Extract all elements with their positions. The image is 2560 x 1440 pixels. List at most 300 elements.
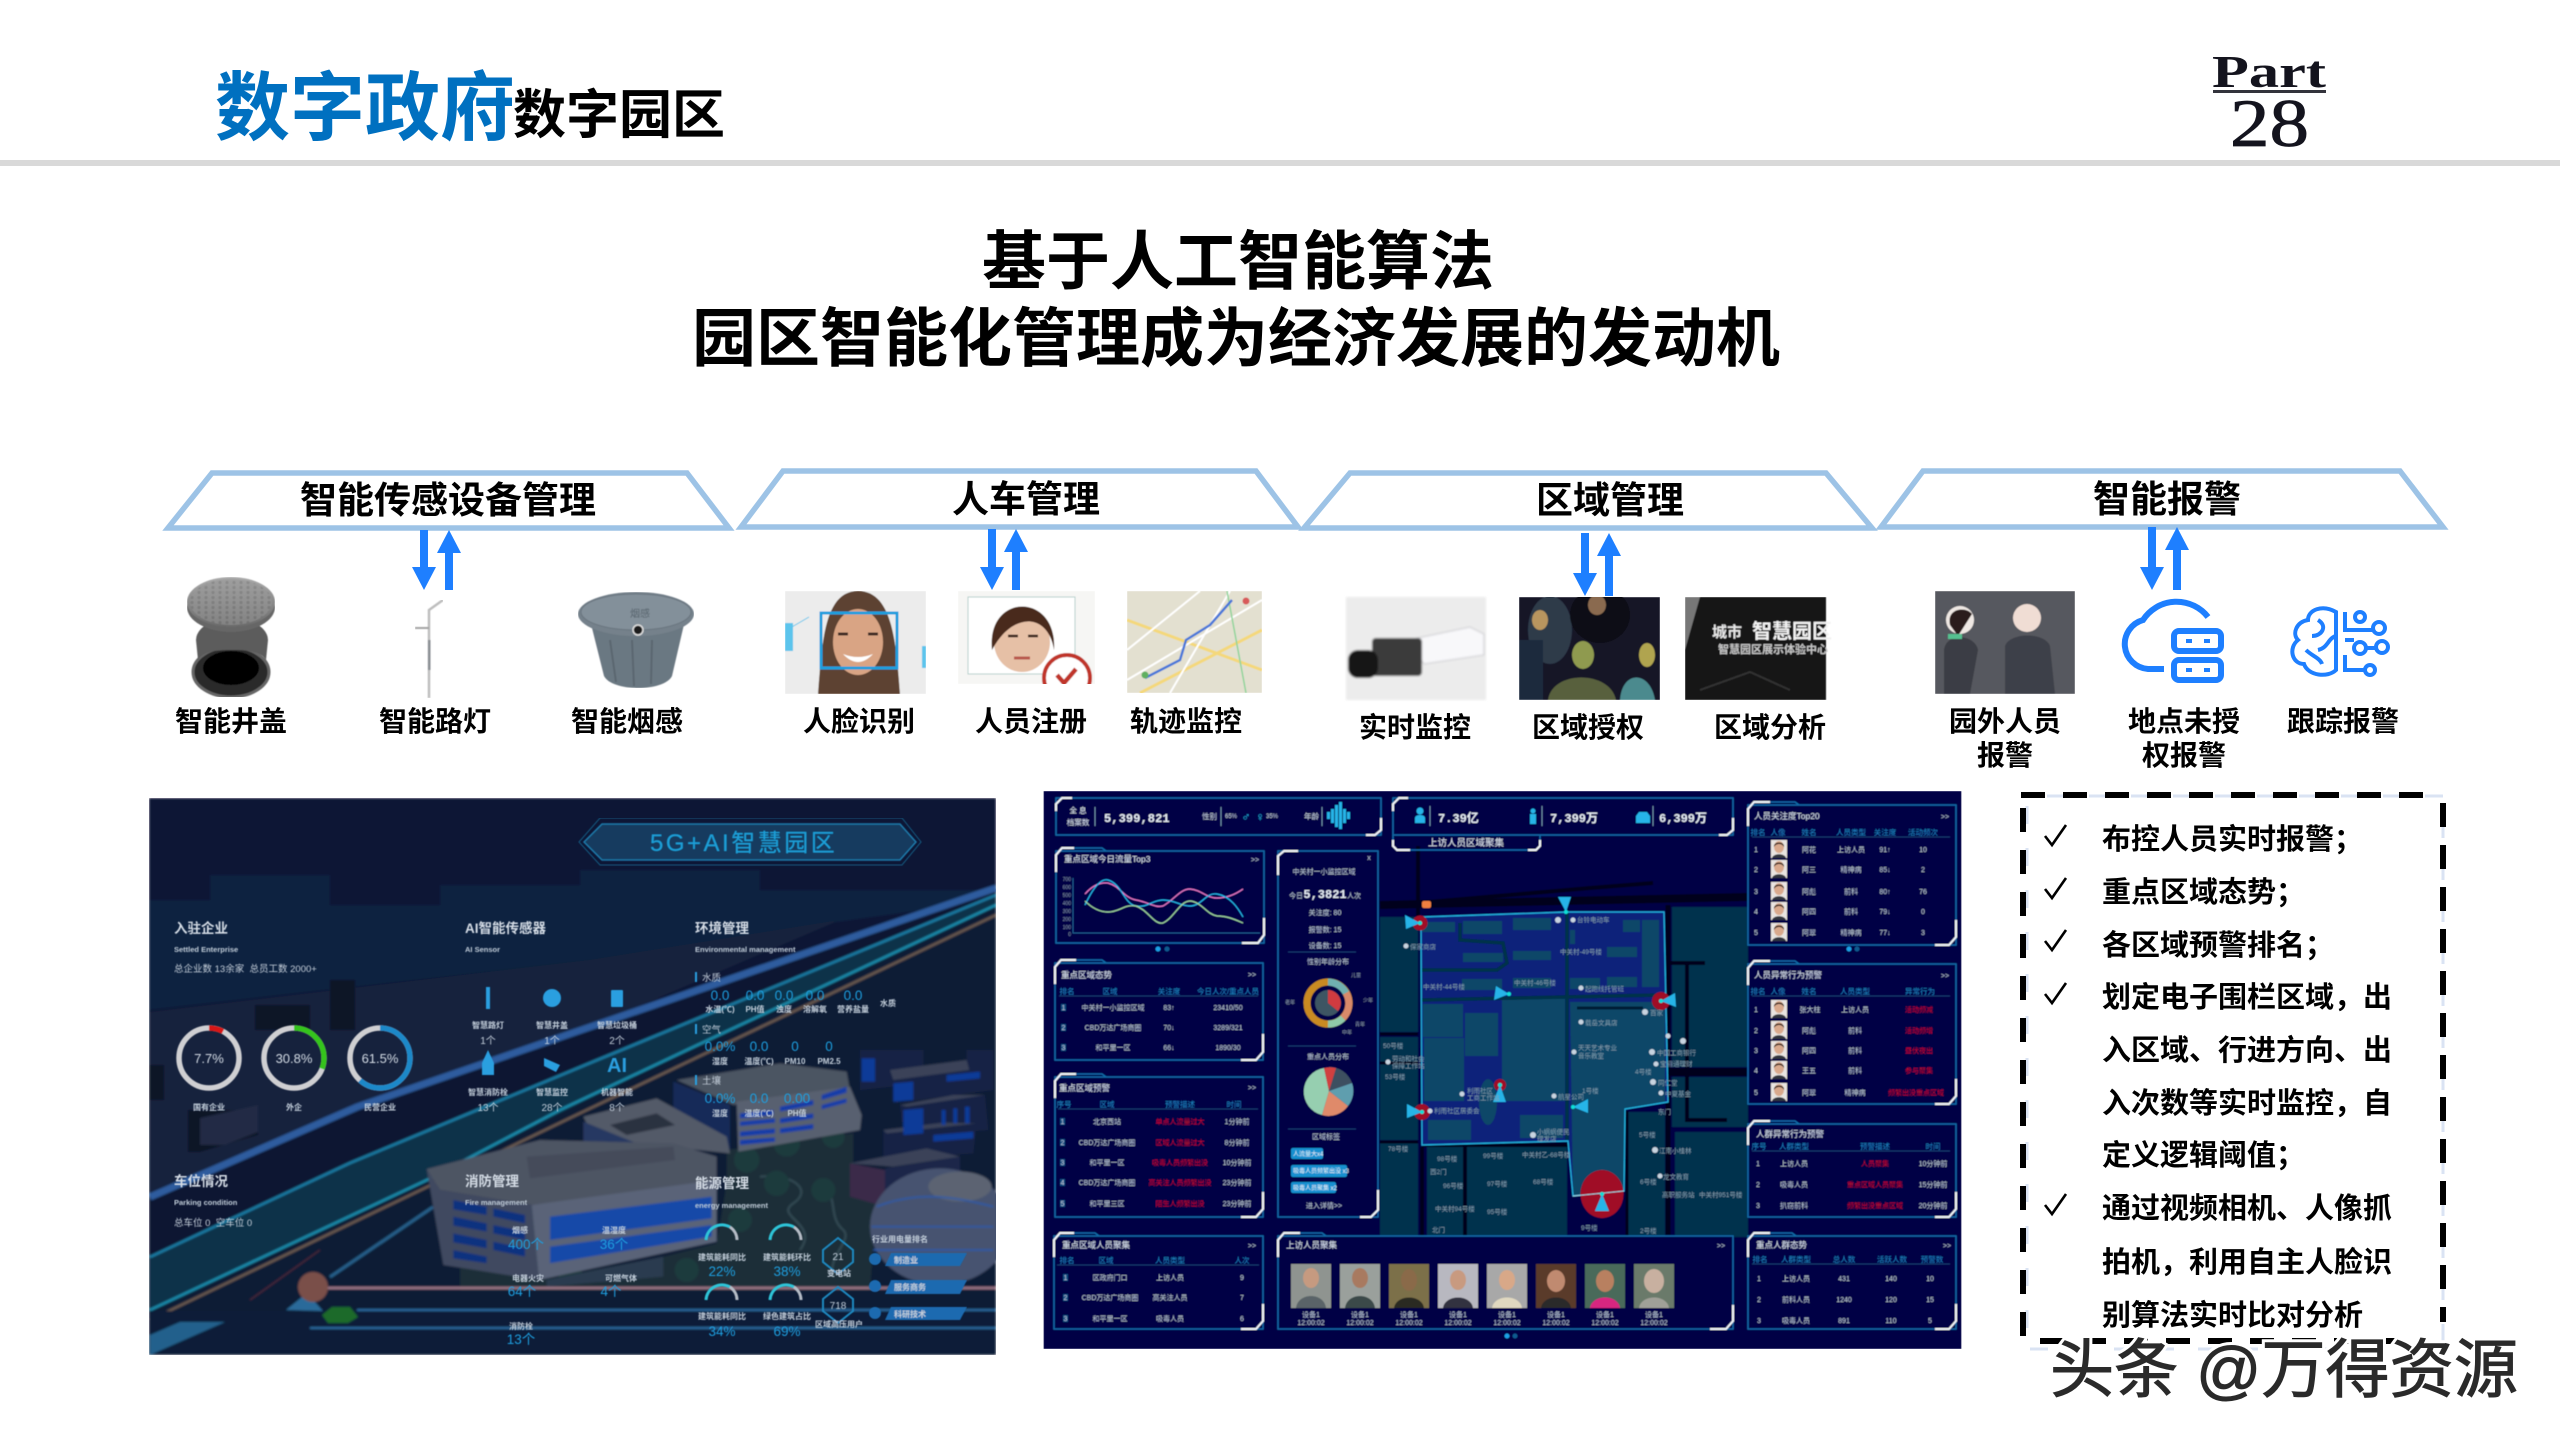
panel: group abnormal behaviour warning: 20分钟前 bbox=[1919, 1201, 1947, 1210]
category: 智能报警 bbox=[1881, 471, 2443, 527]
map place labels: 音乐教室 bbox=[1578, 1051, 1604, 1060]
dashboard 3D scene backdrop bbox=[149, 798, 1010, 1355]
panel: petitioner gathering photo strip: 设备1 bbox=[1351, 1310, 1369, 1319]
panel: personnel abnormal behaviour warning: 人员异常行为预警 bbox=[1754, 970, 1823, 980]
panel: key group trend table: 总人数 bbox=[1833, 1254, 1856, 1264]
environment block: 0 bbox=[791, 1039, 799, 1054]
panel: petitioner gathering photo strip: 设备1 bbox=[1547, 1310, 1565, 1319]
fire management block: Fire management bbox=[465, 1198, 528, 1207]
panel: key totals: 7,399万 bbox=[1550, 812, 1598, 826]
panel: key area warning table: 23分钟前 bbox=[1223, 1178, 1251, 1187]
map place labels: 78号楼 bbox=[1388, 1144, 1409, 1153]
main heading: 园区智能化管理成为经济发展的发动机 bbox=[692, 303, 1780, 375]
checklist text: 别算法实时比对分析 bbox=[2102, 1299, 2363, 1332]
panel: key area warning table: 3 bbox=[1061, 1160, 1065, 1167]
callout: feature checklist bbox=[2021, 795, 2443, 1349]
panel: key area trend table: CBD万达广场商圈 bbox=[1085, 1023, 1141, 1032]
panel: personnel abnormal behaviour warning: 前科 bbox=[1848, 1066, 1862, 1075]
panel: monitoring area detail column: 中关村一小监控区域 bbox=[1292, 867, 1356, 876]
map place labels: 保家商店 bbox=[1410, 942, 1436, 951]
panel: personnel attention top 20: 姓名 bbox=[1802, 827, 1816, 837]
environment block: 0.0 bbox=[746, 988, 764, 1003]
environment block: 0.0 bbox=[844, 988, 862, 1003]
panel: monitoring area detail column: 区域标签 bbox=[1312, 1132, 1340, 1141]
panel: personnel monitoring dashboard bbox=[1044, 791, 1962, 1349]
panel: personnel attention top 20: 80↑ bbox=[1879, 889, 1891, 896]
panel: key area warning table: 吸毒人员频繁出没 bbox=[1152, 1158, 1208, 1167]
panel: personnel attention top 20: 4 bbox=[1754, 909, 1758, 916]
panel: monitoring area detail column: 中年 bbox=[1342, 1029, 1352, 1036]
map place labels: 载岳文具店 bbox=[1585, 1018, 1618, 1027]
map place labels: 理发店 bbox=[1537, 1134, 1557, 1143]
environment block: 水温(℃) bbox=[705, 1004, 735, 1014]
panel: personnel attention top 20: 阿翠 bbox=[1802, 928, 1816, 937]
panel: petitioner gathering photo strip: >> bbox=[1717, 1243, 1725, 1250]
panel: group abnormal behaviour warning bbox=[1748, 1121, 1956, 1217]
energy management block: 科研技术 bbox=[894, 1309, 926, 1319]
panel: monitoring area detail column: 5,3821 bbox=[1303, 888, 1347, 902]
fire management block: 4个 bbox=[600, 1284, 622, 1299]
AI sensors block: 机器智能 bbox=[601, 1087, 633, 1097]
map place labels: 西2门 bbox=[1430, 1167, 1447, 1176]
enterprises block: 国有企业 bbox=[193, 1102, 225, 1112]
panel: personnel attention top 20: 2 bbox=[1754, 867, 1758, 874]
checklist text: 定义逻辑阈值； bbox=[2102, 1139, 2305, 1172]
panel: key area gathering table: 和平里一区 bbox=[1092, 1314, 1128, 1323]
map place labels: 99号楼 bbox=[1483, 1151, 1504, 1160]
panel: personnel abnormal behaviour warning: 上访人员 bbox=[1841, 1005, 1869, 1014]
environment block: 空气 bbox=[702, 1024, 722, 1036]
parking block: Parking condition bbox=[174, 1198, 238, 1207]
map place labels: 高职服务站 bbox=[1662, 1190, 1695, 1199]
AI sensors block: 2个 bbox=[609, 1035, 625, 1047]
environment block: 湿度 bbox=[712, 1056, 728, 1066]
panel: key area trend table: 中关村一小监控区域 bbox=[1082, 1003, 1144, 1012]
label: 园外人员报警: 园外人员 bbox=[1949, 706, 2061, 737]
panel: personnel attention top 20: 上访人员 bbox=[1837, 845, 1865, 854]
checklist text: 重点区域态势； bbox=[2102, 876, 2305, 909]
map place labels: 97号楼 bbox=[1487, 1179, 1508, 1188]
panel: petitioner gathering photo strip: 设备1 bbox=[1596, 1310, 1614, 1319]
map place labels bbox=[1383, 915, 1743, 1235]
panel: monitoring area detail column: 吸毒人员聚集 x2 bbox=[1293, 1184, 1338, 1192]
panel: personnel attention top 20: 76 bbox=[1919, 889, 1927, 896]
panel: key area gathering table: 人员类型 bbox=[1155, 1255, 1185, 1265]
icon: cloud with servers bbox=[2125, 602, 2221, 680]
panel: personnel abnormal behaviour warning: 4 bbox=[1754, 1068, 1758, 1075]
panel: monitoring area detail column: 儿童 bbox=[1351, 972, 1361, 979]
panel: petitioner gathering photo strip: 设备1 bbox=[1498, 1310, 1516, 1319]
map place labels: 利雨社区 bbox=[1467, 1086, 1494, 1095]
category: 智能传感设备管理 bbox=[168, 473, 729, 528]
environment block: PM2.5 bbox=[817, 1057, 841, 1066]
donut chart bbox=[1307, 982, 1349, 1024]
panel: petitioner gathering photo strip: 12:00:02 bbox=[1395, 1320, 1423, 1327]
panel: monitoring area detail column: 性别年龄分布 bbox=[1307, 957, 1349, 966]
energy management block: 制造业 bbox=[894, 1255, 918, 1265]
image: park lobby area analysis: 智慧园区 bbox=[1752, 620, 1832, 643]
panel: group abnormal behaviour warning: 10分钟前 bbox=[1919, 1159, 1947, 1168]
panel: personnel attention top 20: 人员类型 bbox=[1836, 827, 1866, 837]
panel: personnel abnormal behaviour warning: 参与聚集 bbox=[1905, 1066, 1933, 1075]
panel: personnel attention top 20: 2 bbox=[1921, 867, 1925, 874]
title: 数字政府: 数字政府 bbox=[215, 66, 515, 150]
panel: personnel abnormal behaviour warning: 人员类型 bbox=[1840, 986, 1870, 996]
panel: key area warning table: 2 bbox=[1061, 1140, 1065, 1147]
checklist text bbox=[2102, 823, 2392, 1332]
panel: key area warning table: 10分钟前 bbox=[1223, 1158, 1251, 1167]
panel: key area gathering table bbox=[1054, 1233, 1263, 1329]
panel: group abnormal behaviour warning: 时间 bbox=[1926, 1141, 1940, 1151]
panel: personnel attention top 20: 阿三 bbox=[1802, 865, 1816, 874]
AI sensors block: 智慧井盖 bbox=[536, 1020, 568, 1030]
header divider bbox=[0, 160, 2560, 166]
panel: key area gathering table: 人次 bbox=[1234, 1255, 1250, 1265]
environment block: Environmental management bbox=[695, 945, 796, 954]
panel: key area trend table: 2 bbox=[1062, 1025, 1066, 1032]
watermark: 头条 @万得资源 bbox=[2050, 1334, 2518, 1406]
category: 智能报警: 智能报警 bbox=[2093, 479, 2241, 520]
watermark: 头条 @万得资源 bbox=[2050, 1334, 2518, 1406]
image: surveillance camera bbox=[1346, 597, 1486, 700]
environment block: 温度(℃) bbox=[744, 1108, 774, 1118]
panel: key group trend table: 431 bbox=[1838, 1276, 1850, 1283]
image: crowd area authorization bbox=[1519, 587, 1660, 700]
panel: personnel abnormal behaviour warning: 前科 bbox=[1848, 1026, 1862, 1035]
environment block: PM10 bbox=[785, 1057, 806, 1066]
panel: personnel abnormal behaviour warning: 异常行为 bbox=[1905, 986, 1935, 996]
checklist text: 拍机，利用自主人脸识 bbox=[2102, 1246, 2392, 1279]
panel: profile total: 35% bbox=[1266, 814, 1279, 820]
panel: monitoring area detail column: x bbox=[1367, 855, 1371, 862]
panel: key area trend table: 66↓ bbox=[1163, 1045, 1175, 1052]
energy management block: 行业用电量排名 bbox=[872, 1234, 928, 1244]
label: 园外人员报警: 报警 bbox=[1977, 740, 2033, 771]
map place labels: 53号楼 bbox=[1385, 1072, 1406, 1081]
panel: personnel abnormal behaviour warning: 阿彪 bbox=[1802, 1026, 1816, 1035]
fire management block: 烟感 bbox=[512, 1225, 528, 1235]
panel: personnel abnormal behaviour warning: 王五 bbox=[1802, 1067, 1816, 1075]
panel: today's traffic chart: 400 bbox=[1063, 901, 1071, 907]
icon: AI brain circuit bbox=[2292, 608, 2388, 675]
energy management block: 22% bbox=[708, 1264, 736, 1279]
panel: group abnormal behaviour warning: 重点区域人员聚集 bbox=[1847, 1180, 1903, 1189]
panel: key group trend table: 重点人群态势 bbox=[1756, 1240, 1808, 1250]
panel: personnel abnormal behaviour warning: 张大柱 bbox=[1800, 1005, 1820, 1014]
panel: key area gathering table: 高关注人员 bbox=[1152, 1293, 1188, 1302]
panel: personnel abnormal behaviour warning: 前科 bbox=[1848, 1046, 1862, 1055]
panel: personnel abnormal behaviour warning: >> bbox=[1941, 973, 1949, 980]
parking block: 总车位 0 空车位 0 bbox=[174, 1217, 252, 1229]
label: 人脸识别: 人脸识别 bbox=[803, 706, 915, 737]
AI sensors block: 8个 bbox=[609, 1102, 625, 1114]
panel: today's traffic chart: >> bbox=[1251, 857, 1259, 864]
panel: key group trend table: >> bbox=[1943, 1243, 1951, 1250]
panel: key area trend table: 83↑ bbox=[1163, 1005, 1175, 1012]
panel: personnel attention top 20 bbox=[1748, 802, 1956, 952]
panel: key area gathering table: 吸毒人员 bbox=[1156, 1314, 1184, 1323]
panel: petitioner gathering photo strip: 12:00:02 bbox=[1640, 1320, 1668, 1327]
map place labels: 96号楼 bbox=[1443, 1181, 1464, 1190]
category: 智能传感设备管理: 智能传感设备管理 bbox=[300, 480, 596, 521]
checklist text: 入次数等实时监控，自 bbox=[2102, 1087, 2392, 1120]
AI sensors block: AI bbox=[607, 1055, 627, 1077]
map place labels: 中国工商银行 bbox=[1657, 1048, 1696, 1057]
panel: personnel attention top 20: 85↓ bbox=[1879, 867, 1891, 874]
enterprises block: Settled Enterprise bbox=[174, 945, 238, 954]
label: 实时监控: 实时监控 bbox=[1359, 712, 1471, 743]
panel: monitoring area detail column: 人次 bbox=[1347, 891, 1361, 900]
panel: personnel abnormal behaviour warning: 5 bbox=[1754, 1090, 1758, 1097]
panel: key group trend table: 140 bbox=[1885, 1276, 1897, 1283]
panel: today's traffic chart: 0 bbox=[1068, 932, 1071, 938]
fire management block: 消防栓 bbox=[509, 1321, 533, 1331]
panel: key group trend table: 吸毒人员 bbox=[1782, 1316, 1810, 1325]
panel: key group trend table: 5 bbox=[1928, 1318, 1932, 1325]
panel: personnel attention top 20: 精神病 bbox=[1840, 865, 1862, 874]
environment block: 土壤 bbox=[702, 1075, 722, 1087]
AI sensors block: 智慧路灯 bbox=[472, 1020, 504, 1030]
checklist text: 各区域预警排名； bbox=[2102, 929, 2334, 962]
panel: profile total: ♂ bbox=[1242, 810, 1250, 824]
panel: today's traffic chart: 700 bbox=[1063, 877, 1071, 883]
map place labels: 北门 bbox=[1432, 1225, 1445, 1234]
panel: personnel abnormal behaviour warning: 活动频减 bbox=[1905, 1005, 1933, 1014]
label: 智能井盖: 智能井盖 bbox=[175, 706, 287, 737]
panel: key area gathering table: 7 bbox=[1240, 1295, 1244, 1302]
fire management block bbox=[465, 1173, 637, 1347]
map place labels: 中关村-46号楼 bbox=[1514, 978, 1556, 987]
enterprises block bbox=[174, 920, 410, 1112]
map place labels: 中关村94号楼 bbox=[1435, 1204, 1475, 1213]
panel: personnel attention top 20: 3 bbox=[1754, 889, 1758, 896]
energy management block: 区域高压用户 bbox=[815, 1319, 863, 1329]
environment block: 0.0 bbox=[806, 988, 824, 1003]
building three bbox=[583, 1098, 730, 1153]
panel: today's traffic chart: 600 bbox=[1063, 885, 1071, 891]
panel: monitoring area detail column: 少年 bbox=[1363, 997, 1373, 1004]
energy management block: 服务商务 bbox=[894, 1282, 926, 1292]
panel: today's traffic chart bbox=[1056, 848, 1264, 952]
panel: personnel abnormal behaviour warning: 活动频增 bbox=[1905, 1026, 1933, 1035]
panel: today's traffic chart: 500 bbox=[1063, 893, 1071, 899]
AI sensors block: 智慧监控 bbox=[536, 1087, 568, 1097]
enterprises block: 61.5% bbox=[362, 1051, 399, 1066]
map place labels: 百家 bbox=[1650, 1008, 1664, 1017]
energy management block: energy management bbox=[695, 1201, 768, 1210]
fire management block: 400个 bbox=[508, 1237, 545, 1252]
panel: profile total: 档案数 bbox=[1067, 817, 1090, 827]
panel: key area trend table: 今日人次/重点人员 bbox=[1197, 986, 1260, 996]
panel: group abnormal behaviour warning: 15分钟前 bbox=[1919, 1180, 1947, 1189]
panel: monitoring area detail column: 报警数: 15 bbox=[1309, 925, 1341, 934]
panel: key area warning table: CBD万达广场商圈 bbox=[1079, 1138, 1135, 1147]
environment block: 0 bbox=[825, 1039, 833, 1054]
panel: personnel attention top 20: 阿彪 bbox=[1802, 887, 1816, 896]
page number badge: 28 bbox=[2230, 85, 2309, 161]
main heading: 基于人工智能算法 bbox=[982, 226, 1494, 298]
panel: personnel abnormal behaviour warning: 2 bbox=[1754, 1028, 1758, 1035]
glowing street and car bbox=[149, 1308, 172, 1323]
panel: petitioner gathering photo strip: 12:00:02 bbox=[1591, 1320, 1619, 1327]
panel: personnel attention top 20: 91↑ bbox=[1879, 847, 1891, 854]
AI sensors block: AI Sensor bbox=[465, 945, 500, 954]
AI sensors block: 智慧垃圾桶 bbox=[597, 1020, 637, 1030]
panel: personnel abnormal behaviour warning: 阿四 bbox=[1802, 1046, 1816, 1055]
map place labels: 中关村-49号楼 bbox=[1560, 947, 1602, 956]
panel: key group trend table: 活跃人数 bbox=[1877, 1254, 1907, 1264]
environment block: 水质 bbox=[880, 998, 896, 1008]
checklist text: 入区域、行进方向、出 bbox=[2102, 1034, 2392, 1067]
map place labels: 中关村951号楼 bbox=[1699, 1190, 1743, 1199]
panel: personnel attention top 20: 活动频次 bbox=[1908, 827, 1938, 837]
panel: key area gathering table: 3 bbox=[1064, 1316, 1068, 1323]
icon: smoke sensor bbox=[578, 592, 694, 688]
image: park lobby area analysis bbox=[1685, 597, 1832, 700]
right blocks bbox=[860, 1050, 993, 1160]
checklist text: 划定电子围栏区域，出 bbox=[2102, 981, 2392, 1014]
panel: personnel abnormal behaviour warning: 精神病 bbox=[1844, 1088, 1866, 1097]
panel: key area warning table: 预警描述 bbox=[1165, 1099, 1195, 1109]
panel: group abnormal behaviour warning: 上访人员 bbox=[1780, 1159, 1808, 1168]
map place labels: 中关村乙-68号楼 bbox=[1522, 1150, 1571, 1159]
label: 园外人员报警 bbox=[1949, 706, 2061, 771]
image: park lobby area analysis: 智慧园区展示体验中心 bbox=[1718, 642, 1828, 656]
fire management block: 电器火灾 bbox=[512, 1273, 544, 1283]
panel: petitioner gathering photo strip: 12:00:02 bbox=[1297, 1320, 1325, 1327]
map place labels: 中关村-44号楼 bbox=[1423, 982, 1465, 991]
pie chart bbox=[1304, 1067, 1353, 1116]
panel: key group trend table: 预警数 bbox=[1921, 1254, 1944, 1264]
enterprises block: 民营企业 bbox=[364, 1102, 396, 1112]
environment block: 0.0% bbox=[705, 1091, 735, 1106]
panel: group abnormal behaviour warning: 人群异常行为预警 bbox=[1756, 1129, 1825, 1139]
panel: key area gathering table: 区政府门口 bbox=[1092, 1273, 1128, 1282]
panel: personnel attention top 20: 79↓ bbox=[1879, 909, 1891, 916]
map place labels: 98号楼 bbox=[1437, 1154, 1458, 1163]
map place labels: 台铃电动车 bbox=[1577, 915, 1610, 924]
panel: key group trend table: 上访人员 bbox=[1782, 1274, 1810, 1283]
panel: group abnormal behaviour warning: 序号 bbox=[1752, 1141, 1766, 1151]
panel: personnel attention top 20: 前科 bbox=[1844, 887, 1858, 896]
energy management block: 38% bbox=[773, 1264, 801, 1279]
panel: today's traffic chart: 200 bbox=[1063, 917, 1071, 923]
panel: key group trend table: 人群类型 bbox=[1781, 1254, 1811, 1264]
panel: key group trend table: 120 bbox=[1885, 1297, 1897, 1304]
panel: key area trend table: >> bbox=[1248, 972, 1256, 979]
panel: key area warning table: 时间 bbox=[1226, 1099, 1242, 1109]
panel: today's traffic chart: 100 bbox=[1063, 925, 1071, 931]
map place labels: 68号楼 bbox=[1533, 1177, 1554, 1186]
AI sensors block: 13个 bbox=[477, 1102, 499, 1114]
panel: monitoring area detail column: 进入详情>> bbox=[1306, 1201, 1342, 1210]
panel: personnel attention top 20: 1 bbox=[1754, 847, 1758, 854]
panel: key area trend table: 关注度 bbox=[1158, 986, 1181, 996]
label: 地点未授权报警 bbox=[2128, 706, 2240, 771]
label: 智能路灯: 智能路灯 bbox=[379, 706, 491, 737]
energy management block: 21 bbox=[832, 1252, 844, 1263]
panel: group abnormal behaviour warning: 人群类型 bbox=[1779, 1141, 1809, 1151]
panel: key totals: 上访人员区域聚集 bbox=[1428, 837, 1504, 849]
energy management block: 建筑能耗环比 bbox=[763, 1252, 811, 1262]
panel: key group trend table: 891 bbox=[1838, 1318, 1850, 1325]
panel: key area gathering table: >> bbox=[1248, 1243, 1256, 1250]
panel: profile total: 5,399,821 bbox=[1104, 812, 1170, 826]
round building bbox=[868, 1167, 996, 1282]
image: face recognition bbox=[785, 591, 926, 694]
page number badge: Part bbox=[2212, 46, 2327, 97]
panel: personnel attention top 20: 10 bbox=[1919, 847, 1927, 854]
energy management block: 34% bbox=[708, 1324, 736, 1339]
environment block: 湿度 bbox=[712, 1108, 728, 1118]
label: 区域授权: 区域授权 bbox=[1532, 712, 1644, 743]
icon: smart street lamp bbox=[415, 600, 443, 698]
panel: personnel abnormal behaviour warning: 频繁出没重点区域 bbox=[1888, 1088, 1944, 1097]
panel: key area gathering table: 9 bbox=[1240, 1275, 1244, 1282]
panel: group abnormal behaviour warning: 吸毒人员 bbox=[1780, 1180, 1808, 1189]
panel: personnel attention top 20: 5 bbox=[1754, 930, 1758, 937]
map place labels: 龙文教育 bbox=[1663, 1172, 1690, 1181]
panel: personnel attention top 20: >> bbox=[1941, 814, 1949, 821]
energy management block: 718 bbox=[830, 1301, 847, 1312]
AI sensors block: 28个 bbox=[541, 1102, 563, 1114]
enterprises block: 7.7% bbox=[194, 1051, 224, 1066]
panel: key area gathering table: 2 bbox=[1064, 1295, 1068, 1302]
AI sensors block: 1个 bbox=[544, 1035, 560, 1047]
icon: smoke sensor: 烟感 bbox=[630, 607, 650, 620]
panel: monitoring area detail column: 重点人员分布 bbox=[1307, 1052, 1349, 1061]
image: personnel registration bbox=[958, 592, 1094, 684]
category: 人车管理 bbox=[741, 471, 1298, 527]
map place labels: 工商工作站 bbox=[1467, 1093, 1500, 1102]
panel: personnel abnormal behaviour warning: 姓名 bbox=[1802, 986, 1816, 996]
environment block: 0.00 bbox=[784, 1091, 810, 1106]
panel: key area warning table: 5 bbox=[1061, 1201, 1065, 1208]
panel: petitioner gathering photo strip: 12:00:02 bbox=[1542, 1320, 1570, 1327]
panel: profile total bbox=[1056, 798, 1381, 835]
label: 轨迹监控: 轨迹监控 bbox=[1130, 706, 1242, 737]
label: 地点未授权报警: 权报警 bbox=[2142, 740, 2226, 771]
panel: personnel attention top 20: 人像 bbox=[1770, 827, 1786, 837]
building two bbox=[673, 1082, 730, 1150]
panel: petitioner gathering photo strip: 设备1 bbox=[1645, 1310, 1663, 1319]
panel: personnel abnormal behaviour warning: 昼伏夜出 bbox=[1905, 1046, 1933, 1055]
panel: personnel attention top 20: 排名 bbox=[1750, 827, 1766, 837]
panel: key group trend table: 1 bbox=[1757, 1276, 1761, 1283]
label: 智能烟感: 智能烟感 bbox=[571, 706, 683, 737]
panel: monitoring area detail column bbox=[1278, 851, 1378, 1217]
panel: key totals: 7.39亿 bbox=[1438, 810, 1479, 826]
panel: monitoring area detail column: 老年 bbox=[1285, 999, 1295, 1006]
map place labels: 中夏基金 bbox=[1665, 1089, 1692, 1098]
enterprises block: 总企业数 13余家 总员工数 2000+ bbox=[174, 963, 317, 975]
arrows: 区域管理 bbox=[1573, 533, 1621, 596]
panel: petitioner gathering photo strip: 上访人员聚集 bbox=[1286, 1240, 1338, 1250]
panel: today's traffic chart: 重点区域今日流量Top3 bbox=[1064, 854, 1151, 864]
environment block: 营养盐量 bbox=[837, 1004, 869, 1014]
panel: key area warning table: 8分钟前 bbox=[1225, 1138, 1249, 1147]
panel: personnel attention top 20: 关注度 bbox=[1874, 827, 1897, 837]
panel: key group trend table: 1240 bbox=[1836, 1297, 1852, 1304]
environment block: 0.0 bbox=[750, 1091, 768, 1106]
map place labels: 小蜗蜗便民 bbox=[1537, 1127, 1570, 1136]
panel: petitioner gathering photo strip: 12:00:02 bbox=[1444, 1320, 1472, 1327]
panel: key area warning table: 序号 bbox=[1056, 1099, 1072, 1109]
panel: monitoring area detail column: 今日 bbox=[1289, 891, 1303, 900]
panel: key area trend table: 3 bbox=[1062, 1045, 1066, 1052]
panel: key area warning table: 区域 bbox=[1100, 1099, 1115, 1109]
panel: profile total: 全 息 bbox=[1069, 805, 1087, 815]
